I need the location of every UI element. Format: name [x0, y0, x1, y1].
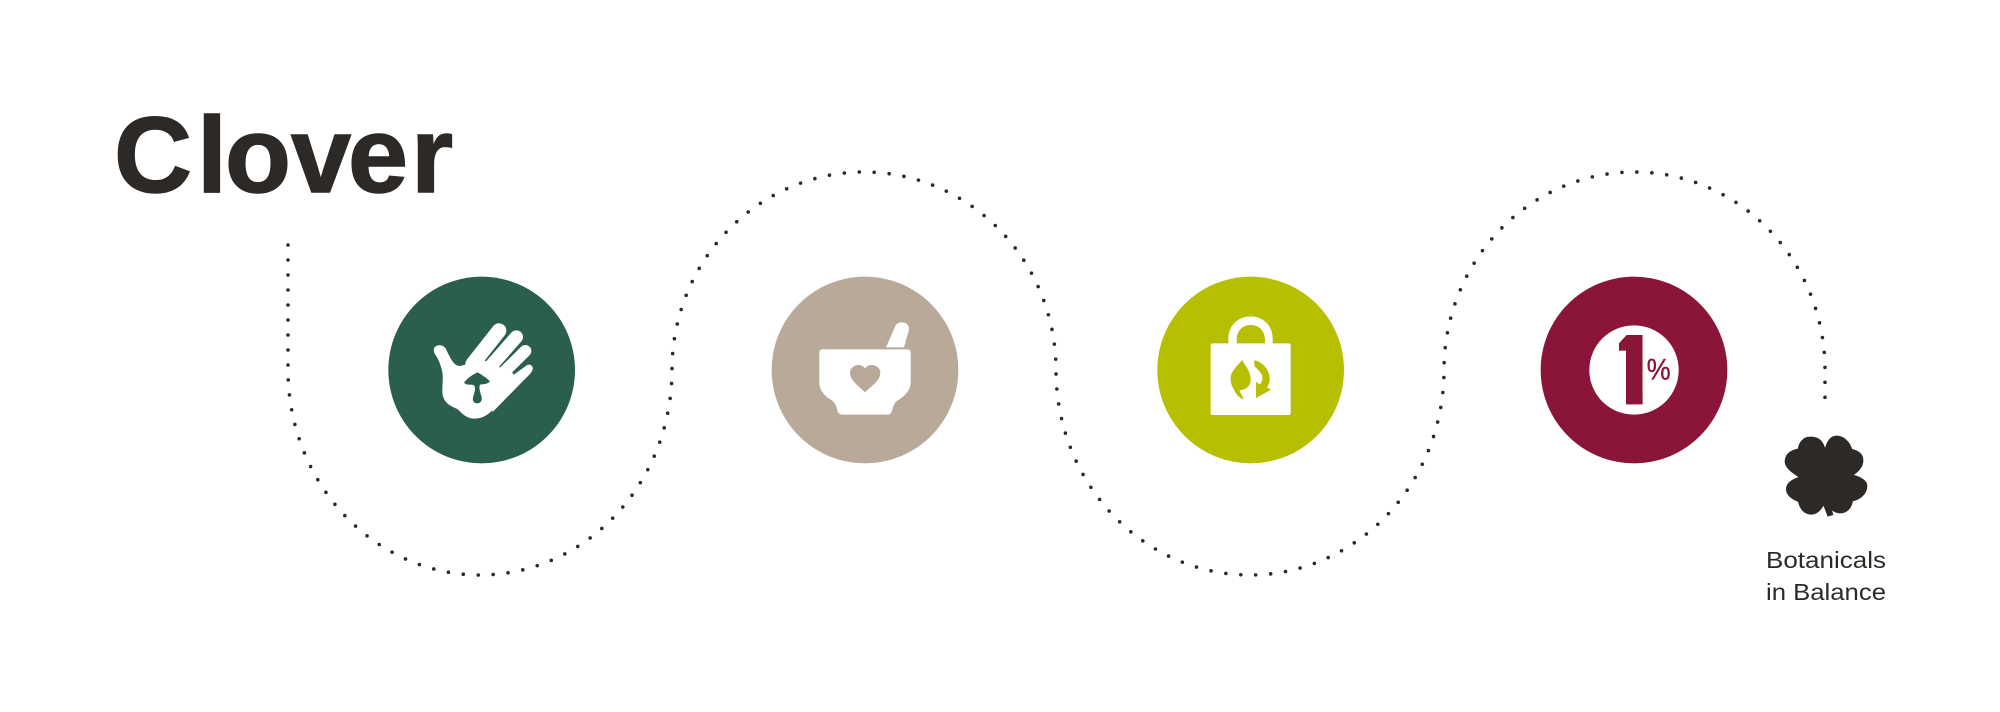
circle icon: hand with mushroom: [388, 277, 575, 463]
leaf: [1231, 360, 1251, 399]
recycle arrow: [1254, 360, 1271, 398]
percent sign: %: [1647, 353, 1671, 386]
circle icon: shopping bag with leaf and recycle arrow: [1157, 277, 1344, 463]
circle icon: mortar and pestle with heart: [772, 277, 958, 463]
title: Clover: Clover: [114, 94, 453, 215]
numeral 1: 1: [1604, 314, 1660, 426]
mushroom: [464, 372, 490, 403]
circle icon: 1%: [1541, 277, 1727, 463]
fingers: [473, 331, 525, 379]
heart: [850, 365, 880, 392]
caption: Botanicals in Balance: Botanicals: [1766, 547, 1886, 573]
caption: Botanicals in Balance: [1766, 547, 1886, 605]
infographic canvas: [118, 113, 1886, 600]
dotted wave path: [288, 172, 1825, 575]
caption: Botanicals in Balance: in Balance: [1766, 579, 1886, 605]
clover logo icon: [1785, 436, 1867, 517]
